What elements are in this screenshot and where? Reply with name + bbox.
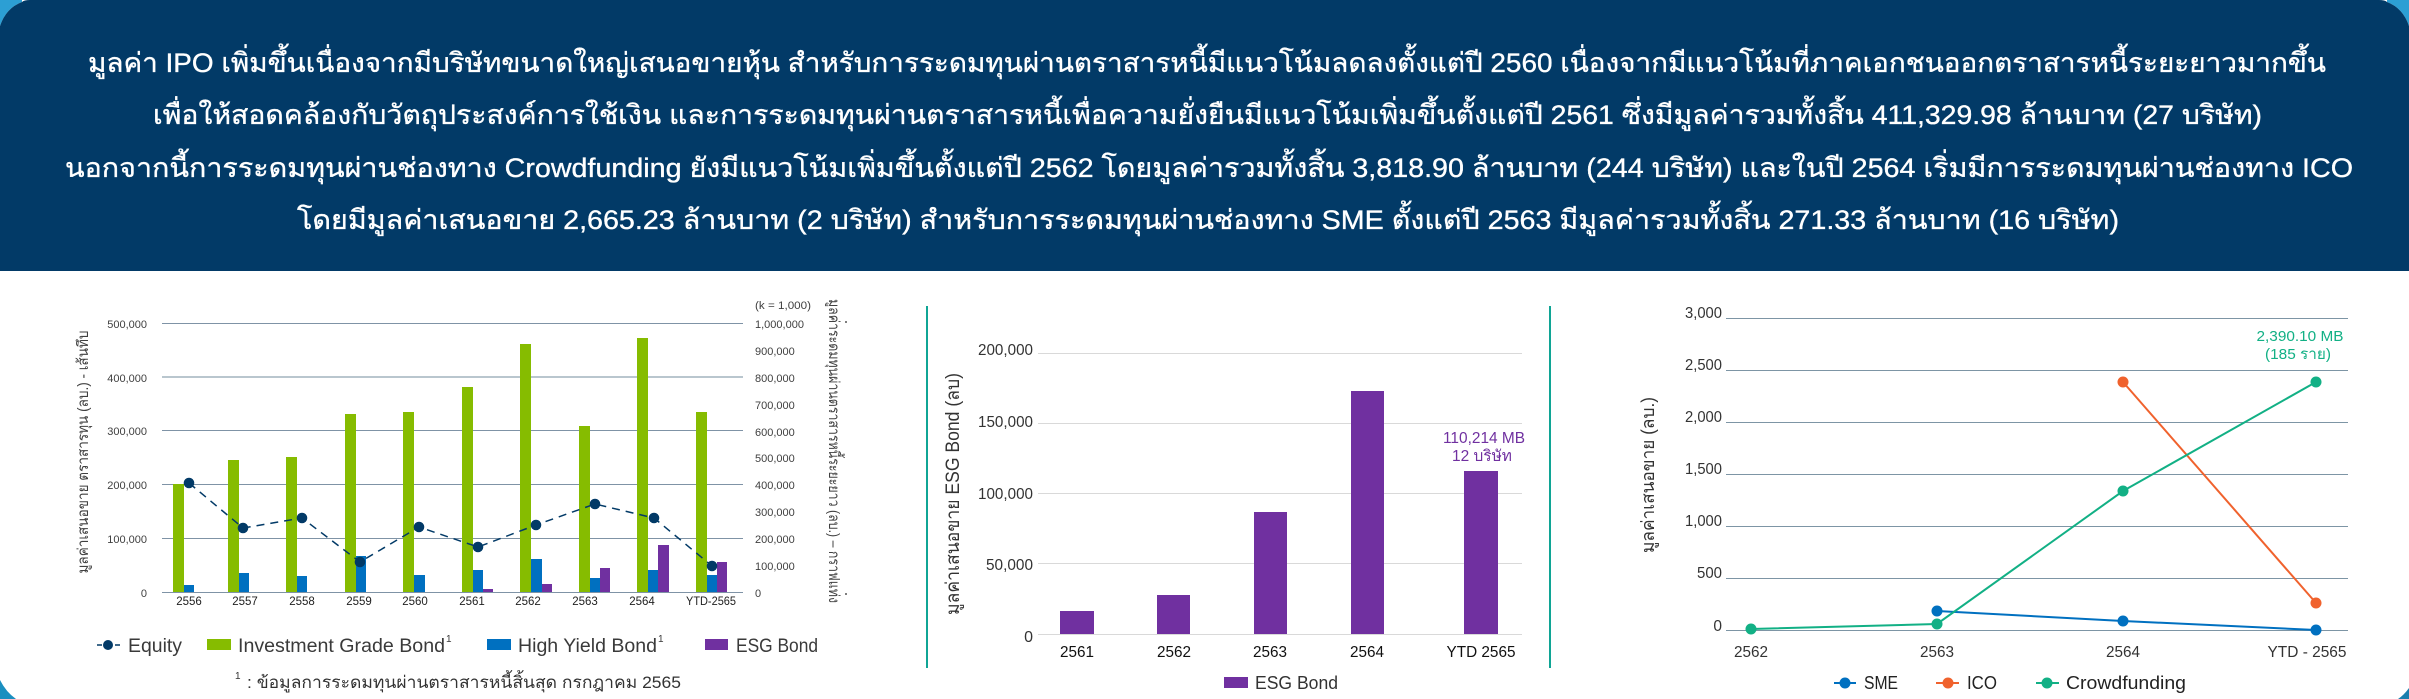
y axis labels — [978, 342, 1033, 646]
x axis labels: 2556 — [176, 596, 202, 608]
y axis labels: 0 — [1713, 618, 1722, 635]
y axis labels: 150,000 — [978, 414, 1033, 431]
legend: 1 — [446, 634, 452, 645]
x axis labels: 2562 — [515, 596, 541, 608]
callout: latest ESG value: 12 บริษัท — [1452, 448, 1512, 465]
legend: High Yield Bond — [518, 636, 657, 657]
y axis labels: 500 — [1697, 565, 1722, 582]
x axis labels: 2560 — [402, 596, 428, 608]
legend — [97, 634, 818, 657]
headline text: เพื่อให้สอดคล้องกับวัตถุประสงค์การใช้เงิน และการระดมทุนผ่านตราสารหนี้เพื่อความยั่งยืนมีแนวโน้มเพิ่มขึ้นตั้งแต่ปี 2561 ซึ่งมีมูลค่ารวมทั้งสิ้น 411,329.98 ล้านบาท (27 บริษัท) — [153, 95, 2262, 132]
callout: crowdfunding value — [2256, 328, 2344, 363]
right axis labels: 700,000 — [755, 400, 795, 412]
headline text: โดยมีมูลค่าเสนอขาย 2,665.23 ล้านบาท (2 บริษัท) สำหรับการระดมทุนผ่านช่องทาง SME ตั้งแต่ปี 2563 มีมูลค่ารวมทั้งสิ้น 271.33 ล้านบาท (16 บริษัท) — [297, 200, 2119, 237]
right axis labels: (k = 1,000) — [755, 300, 811, 312]
y axis labels: 100,000 — [978, 486, 1033, 503]
x axis labels: 2564 — [1350, 644, 1384, 661]
y axis labels: 2,500 — [1685, 357, 1722, 374]
legend: ESG Bond — [736, 636, 818, 657]
y axis labels: 50,000 — [986, 557, 1033, 574]
bars — [1060, 391, 1498, 634]
callout: crowdfunding value: 2,390.10 MB — [2256, 328, 2344, 345]
high yield bond bars — [184, 556, 717, 592]
right axis labels: 200,000 — [755, 534, 795, 546]
x axis labels: 2563 — [1920, 644, 1954, 661]
series: SME — [1932, 606, 2322, 636]
left axis labels: 200,000 — [107, 480, 147, 492]
right axis labels: 300,000 — [755, 507, 795, 519]
panel: ESG bond bar chart — [927, 306, 1550, 693]
legend: Equity — [128, 636, 183, 657]
x axis labels: YTD 2565 — [1446, 644, 1516, 661]
left axis labels: 500,000 — [107, 319, 147, 331]
left axis labels: 0 — [141, 588, 147, 600]
headline text: มูลค่า IPO เพิ่มขึ้นเนื่องจากมีบริษัทขนาดใหญ่เสนอขายหุ้น สำหรับการระดมทุนผ่านตราสารหนี้มีแนวโน้มลดลงตั้งแต่ปี 2560 เนื่องจากมีแนวโน้มที่ภาคเอกชนออกตราสารหนี้ระยะยาวมากขึ้น — [88, 43, 2326, 80]
x axis labels: YTD - 2565 — [2268, 644, 2346, 661]
footnote: : ข้อมูลการระดมทุนผ่านตราสารหนี้สิ้นสุด กรกฎาคม 2565 — [247, 670, 681, 693]
x axis labels: 2564 — [629, 596, 655, 608]
right axis labels: 800,000 — [755, 373, 795, 385]
legend: Crowdfunding — [2066, 673, 2186, 693]
x axis labels: 2563 — [572, 596, 598, 608]
x axis labels: 2557 — [232, 596, 258, 608]
right axis labels: 900,000 — [755, 346, 795, 358]
x axis labels: 2558 — [289, 596, 315, 608]
left axis labels: 300,000 — [107, 426, 147, 438]
headline text: นอกจากนี้การระดมทุนผ่านช่องทาง Crowdfunding ยังมีแนวโน้มเพิ่มขึ้นตั้งแต่ปี 2562 โดยมูลค่ารวมทั้งสิ้น 3,818.90 ล้านบาท (244 บริษัท) และในปี 2564 เริ่มมีการระดมทุนผ่านช่องทาง ICO — [65, 148, 2353, 185]
y axis labels: 0 — [1024, 629, 1033, 646]
right axis labels: 600,000 — [755, 427, 795, 439]
series: Crowdfunding — [1746, 376, 2322, 634]
footnote: 1 — [235, 671, 241, 682]
left axis labels: 400,000 — [107, 373, 147, 385]
y axis labels: 1,000 — [1685, 513, 1722, 530]
panel: equity and bond combo chart — [75, 299, 847, 693]
callout: latest ESG value — [1443, 430, 1525, 465]
right axis labels: 0 — [755, 588, 761, 600]
left axis labels — [107, 319, 147, 600]
left axis title: มูลค่าเสนอขาย ตราสารทุน (ลบ.) - เส้นทึบ — [75, 330, 93, 574]
legend: Investment Grade Bond — [238, 636, 445, 657]
legend — [1834, 673, 2186, 693]
left axis labels: 100,000 — [107, 534, 147, 546]
series: ICO — [2118, 376, 2322, 608]
right axis labels — [755, 300, 811, 600]
x axis labels: 2561 — [459, 596, 485, 608]
y axis labels: 3,000 — [1685, 305, 1722, 322]
y axis title: มูลค่าเสนอขาย (ลบ.) — [1638, 397, 1659, 553]
right axis labels: 100,000 — [755, 561, 795, 573]
callout: crowdfunding value: (185 ราย) — [2265, 346, 2331, 363]
panel: SME ICO Crowdfunding line chart — [1638, 305, 2348, 693]
x axis labels: 2564 — [2106, 644, 2140, 661]
y axis labels: 2,000 — [1685, 409, 1722, 426]
x axis labels: 2559 — [346, 596, 372, 608]
x axis labels: 2562 — [1157, 644, 1191, 661]
ESG bond bars — [483, 545, 727, 592]
equity dashed line — [184, 478, 717, 571]
right axis labels: 500,000 — [755, 453, 795, 465]
legend: 1 — [658, 634, 664, 645]
callout: latest ESG value: 110,214 MB — [1443, 430, 1525, 447]
x axis labels — [1734, 644, 2346, 661]
x axis labels: 2561 — [1060, 644, 1094, 661]
right axis labels: 1,000,000 — [755, 319, 804, 331]
right axis labels: 400,000 — [755, 480, 795, 492]
x axis labels: YTD-2565 — [686, 596, 736, 608]
x axis labels: 2562 — [1734, 644, 1768, 661]
right axis title: มูลค่าระดมทุนผ่านตราสารหนี้ระยะยาว (ลบ.) – กราฟแท่ง — [824, 299, 845, 603]
y axis title: มูลค่าเสนอขาย ESG Bond (ลบ) — [943, 373, 964, 615]
investment grade bond bars — [173, 338, 707, 592]
legend: SME — [1864, 673, 1898, 693]
legend: ESG Bond — [1255, 673, 1338, 693]
x axis labels: 2563 — [1253, 644, 1287, 661]
x axis labels — [1060, 644, 1516, 661]
panel: header summary — [0, 0, 2409, 271]
y axis labels: 1,500 — [1685, 461, 1722, 478]
y axis labels: 200,000 — [978, 342, 1033, 359]
x axis labels — [176, 596, 736, 608]
y axis labels — [1685, 305, 1722, 635]
legend: ICO — [1967, 673, 1997, 693]
headline text — [65, 43, 2353, 237]
